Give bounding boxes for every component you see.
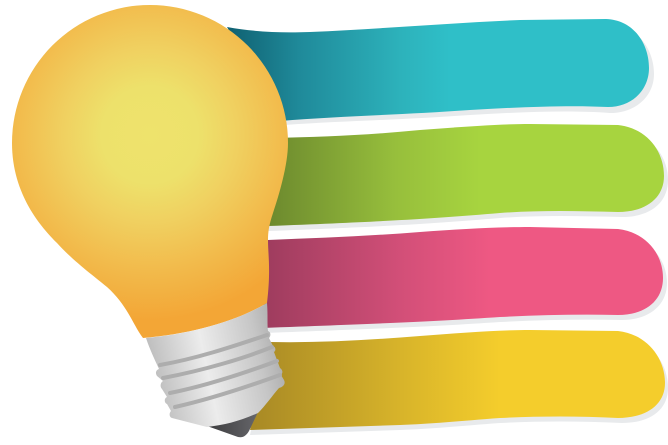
thread grooves bbox=[160, 335, 280, 407]
panel: green banner bbox=[268, 124, 668, 231]
panel: yellow banner bbox=[250, 330, 668, 435]
icon: light bulb bbox=[12, 5, 288, 437]
panel: teal banner bbox=[227, 19, 654, 125]
screw base bbox=[146, 303, 285, 437]
panel: pink banner bbox=[262, 227, 667, 333]
metal collar and thread bbox=[146, 303, 285, 427]
bulb glass bbox=[12, 5, 288, 338]
dark contact tip bbox=[207, 412, 258, 437]
